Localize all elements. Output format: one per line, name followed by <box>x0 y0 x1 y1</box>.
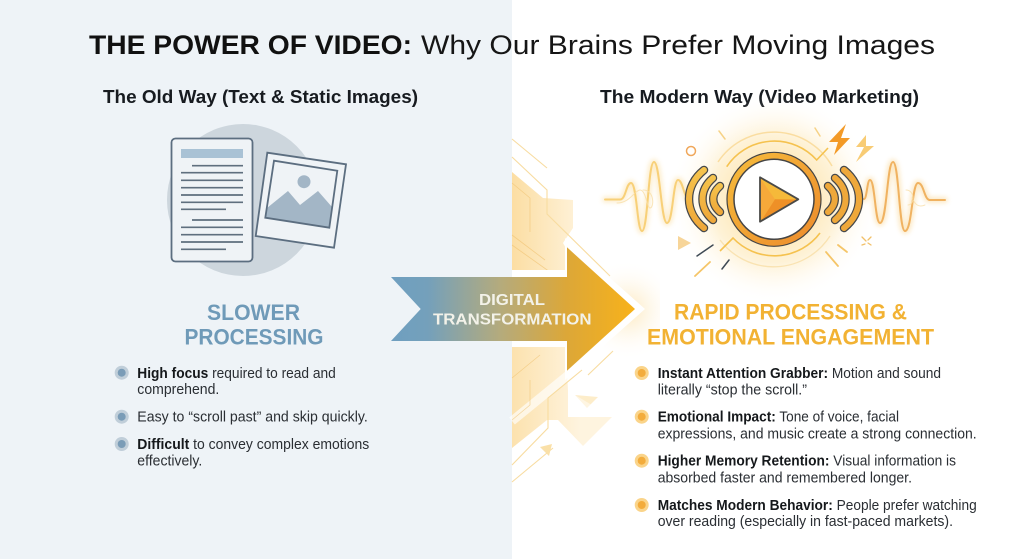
sound arcs left <box>689 170 720 228</box>
item 3 text: effectively. <box>137 454 202 470</box>
heading: slower processing: PROCESSING <box>184 324 324 350</box>
bullet 2 <box>115 410 129 424</box>
item 1 text: High focus required to read and <box>137 366 336 382</box>
item 2 text: Easy to “scroll past” and skip quickly. <box>137 410 368 426</box>
item 2 text: Emotional Impact: Tone of voice, facial <box>658 410 899 426</box>
item 1 text: Instant Attention Grabber: Motion and sound <box>658 366 941 382</box>
item 3 text: absorbed faster and remembered longer. <box>658 470 912 486</box>
bullet 4 <box>635 498 649 512</box>
heading: slower processing <box>184 300 324 350</box>
title subtitle: Why Our Brains Prefer Moving Images <box>421 30 935 60</box>
waveform right <box>864 162 945 231</box>
list: modern way benefits <box>635 366 977 530</box>
icon: document and photo <box>167 124 346 276</box>
decorative tech pattern behind arrow <box>512 139 613 482</box>
item 3 text: Difficult to convey complex emotions <box>137 437 369 453</box>
panel: modern way background <box>512 0 1024 559</box>
item 3 text: Higher Memory Retention: Visual information is <box>658 454 956 470</box>
arrow: digital transformation <box>391 238 645 380</box>
icon: text document <box>172 138 252 262</box>
arrow label: DIGITAL <box>479 292 545 309</box>
panel: old way background <box>0 0 512 559</box>
arrow label: TRANSFORMATION <box>433 312 592 328</box>
heading: modern way: The Modern Way (Video Marketing) <box>600 87 919 107</box>
item 4 text: over reading (especially in fast-paced markets). <box>658 514 953 530</box>
heading: slower processing: SLOWER <box>207 300 300 325</box>
item 3 text <box>137 437 369 470</box>
lightning bolts <box>829 124 874 162</box>
item 1 text: literally “stop the scroll.” <box>658 382 807 398</box>
icon: photo <box>256 153 346 248</box>
icon: video play with sound waves <box>605 94 945 304</box>
play button <box>727 152 821 246</box>
item 2 text <box>658 410 977 442</box>
item 3 text <box>658 454 956 486</box>
item 1 text <box>658 366 941 398</box>
outer partial rings <box>718 132 832 267</box>
title: THE POWER OF VIDEO: <box>89 30 412 60</box>
item 2 text: expressions, and music create a strong connection. <box>658 426 977 442</box>
bullet 1 <box>115 366 129 380</box>
item 1 text: comprehend. <box>137 382 219 398</box>
waveform left <box>605 162 689 231</box>
bullet 3 <box>635 454 649 468</box>
item 4 text <box>658 498 977 530</box>
bullet 2 <box>635 410 649 424</box>
small accents <box>678 128 871 276</box>
heading: rapid processing: RAPID PROCESSING & <box>674 300 907 324</box>
list: old way drawbacks <box>115 366 369 470</box>
sound arcs right <box>828 170 859 228</box>
bullet 3 <box>115 437 129 451</box>
arrow label <box>433 292 592 328</box>
bullet 1 <box>635 366 649 380</box>
heading: rapid processing <box>647 300 934 350</box>
item 4 text: Matches Modern Behavior: People prefer watching <box>658 498 977 514</box>
heading: old way: The Old Way (Text & Static Images) <box>103 87 418 107</box>
item 1 text <box>137 366 336 398</box>
heading: rapid processing: EMOTIONAL ENGAGEMENT <box>647 324 934 350</box>
